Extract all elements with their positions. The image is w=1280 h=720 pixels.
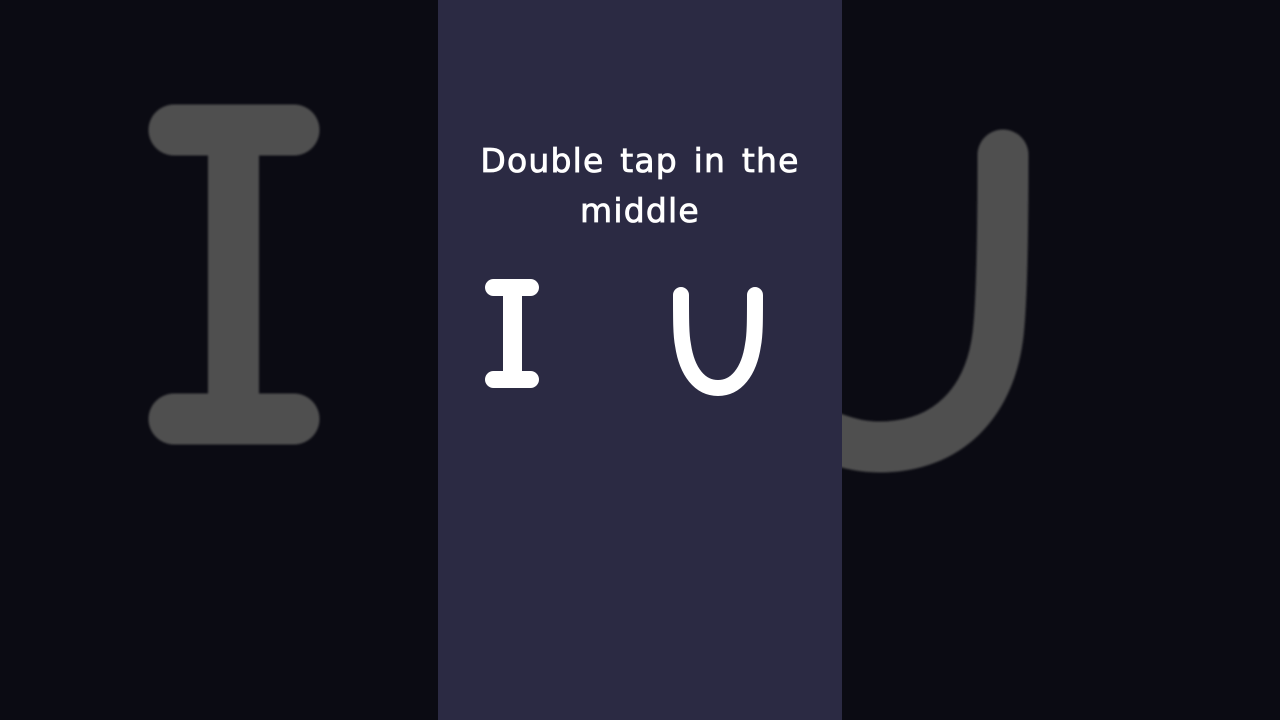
letter U	[681, 295, 755, 388]
background letter U	[830, 155, 1003, 447]
title: middle	[580, 191, 700, 230]
center panel	[438, 0, 842, 720]
title	[480, 141, 800, 230]
background letter I	[174, 130, 294, 419]
title: Double tap in the	[480, 141, 800, 180]
letter I	[494, 287, 530, 380]
